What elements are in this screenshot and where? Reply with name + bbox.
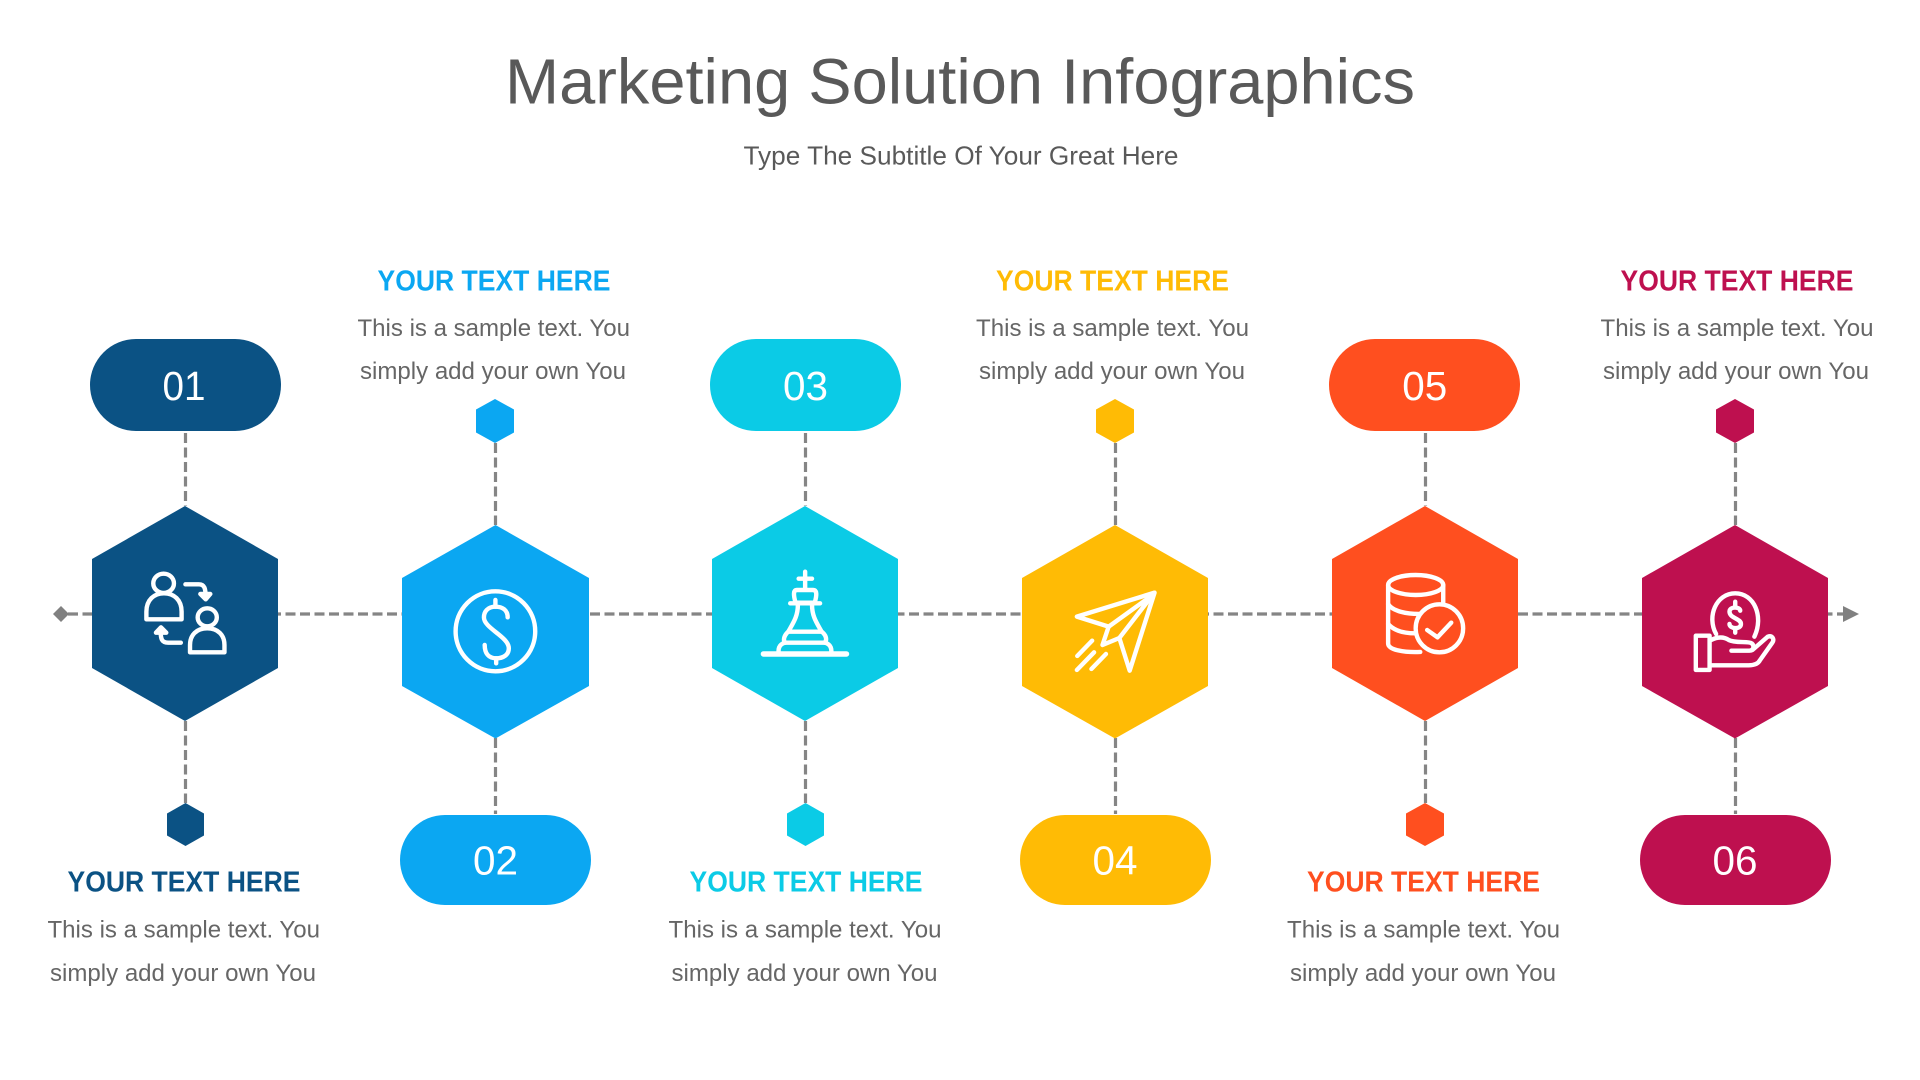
heading 06: YOUR TEXT HERE: [1620, 266, 1854, 298]
number pill 03: [710, 339, 901, 431]
number pill 02: [400, 815, 591, 905]
hexagon 04: [1022, 525, 1208, 738]
icon: people exchange: [146, 574, 224, 652]
number pill 01: 01: [162, 363, 206, 409]
small hexagon 06: [1716, 399, 1754, 443]
heading 03: YOUR TEXT HERE: [690, 866, 922, 898]
number pill 05: 05: [1402, 363, 1447, 409]
number pill 06: 06: [1712, 838, 1758, 884]
subtitle: Type The Subtitle Of Your Great Here: [744, 140, 1178, 170]
small hexagon 02: [476, 399, 514, 443]
hexagon 01: [92, 506, 278, 721]
step 04: [976, 266, 1249, 905]
body text 05: [1287, 916, 1560, 987]
heading 04: YOUR TEXT HERE: [996, 266, 1229, 298]
icon: dollar coin: [456, 591, 535, 671]
number pill 04: 04: [1092, 838, 1138, 884]
step 01: [48, 339, 320, 987]
body text 03: This is a sample text. You: [668, 916, 942, 944]
body text 03: simply add your own You: [672, 960, 938, 987]
icon: hand holding coin: [1696, 593, 1773, 670]
body text 06: [1600, 315, 1874, 385]
timeline arrow: [53, 606, 1859, 622]
icon: chess king: [763, 572, 846, 654]
body text 06: This is a sample text. You: [1600, 315, 1874, 342]
body text 05: simply add your own You: [1290, 960, 1556, 987]
body text 02: This is a sample text. You: [358, 315, 630, 342]
step 06: [1600, 266, 1874, 905]
heading 01: YOUR TEXT HERE: [68, 866, 300, 898]
number pill 04: [1020, 815, 1211, 905]
body text 04: This is a sample text. You: [976, 315, 1249, 342]
body text 01: [48, 916, 320, 987]
step 02: [358, 266, 630, 905]
small hexagon 04: [1096, 399, 1134, 443]
heading 05: YOUR TEXT HERE: [1307, 866, 1540, 898]
heading 02: YOUR TEXT HERE: [378, 266, 610, 298]
number pill 06: [1640, 815, 1831, 905]
body text 02: [358, 315, 630, 385]
step 03: [668, 339, 942, 987]
body text 01: This is a sample text. You: [48, 916, 320, 944]
number pill 01: [90, 339, 281, 431]
step 05: [1287, 339, 1560, 987]
body text 02: simply add your own You: [360, 358, 626, 385]
small hexagon 03: [787, 803, 824, 846]
body text 01: simply add your own You: [50, 960, 316, 987]
small hexagon 01: [167, 803, 204, 846]
body text 04: simply add your own You: [979, 358, 1245, 385]
number pill 05: [1329, 339, 1520, 431]
body text 05: This is a sample text. You: [1287, 916, 1560, 944]
hexagon 05: [1332, 506, 1518, 721]
hexagon 02: [402, 525, 589, 738]
number pill 03: 03: [783, 363, 828, 409]
number pill 02: 02: [473, 838, 518, 884]
icon: database check: [1388, 575, 1463, 652]
body text 04: [976, 315, 1249, 385]
hexagon 06: [1642, 525, 1828, 738]
icon: paper plane: [1077, 593, 1155, 671]
body text 03: [668, 916, 942, 987]
small hexagon 05: [1406, 803, 1444, 846]
title: Marketing Solution Infographics: [505, 46, 1415, 118]
hexagon 03: [712, 506, 898, 721]
body text 06: simply add your own You: [1603, 358, 1869, 385]
